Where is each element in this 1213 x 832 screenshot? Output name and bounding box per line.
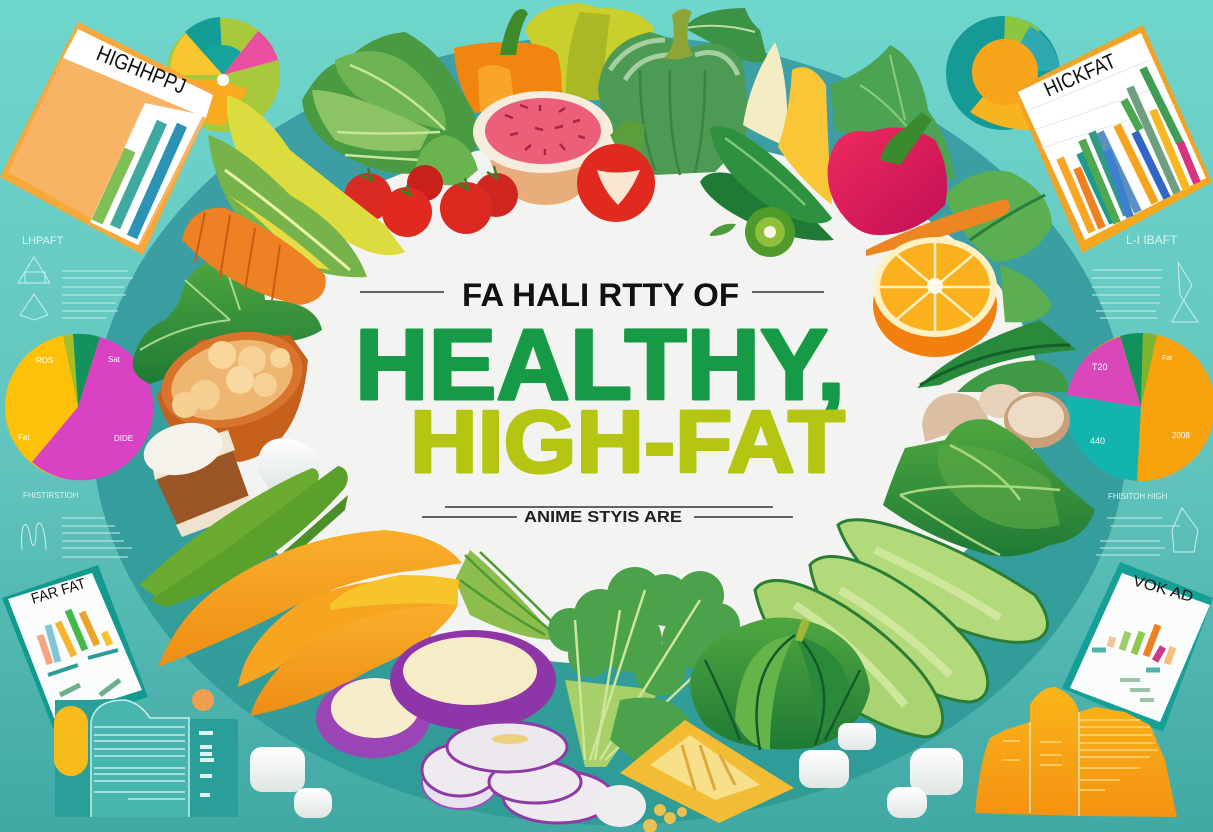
produce: parsley: [548, 567, 740, 767]
produce: green pepper: [598, 9, 747, 175]
pie chart: left: DIDE: [114, 434, 133, 443]
overline rule: [360, 291, 824, 293]
produce: cheese wedge: [620, 720, 794, 823]
produce: yellow-green pepper: [525, 3, 654, 100]
chart sheet: bottom-left Far Fat: [2, 565, 148, 728]
produce: mushrooms: [922, 384, 1070, 448]
pie chart: right: T20: [1092, 362, 1108, 372]
title block: [355, 277, 845, 526]
pie chart: right: 2008: [1172, 431, 1190, 440]
produce: pale yellow squash: [743, 42, 832, 205]
chart title: VOK AD: [1131, 573, 1195, 606]
produce: big leafy green: [883, 419, 1095, 556]
produce: seeds: [643, 804, 687, 832]
pie chart: right: [1066, 333, 1213, 481]
small line diagram: right upper: [1092, 233, 1198, 322]
small line diagram: right upper: L-I IBAFT: [1126, 233, 1178, 247]
produce: red bell pepper: [828, 112, 947, 235]
produce: white cube by jar: [257, 438, 320, 490]
radial wheel: top-right: [946, 16, 1060, 130]
orange skyline block chart: [975, 687, 1177, 817]
chart sheet: bottom-right Vok: [1062, 562, 1213, 732]
pie chart: right: 440: [1090, 436, 1105, 446]
produce: orange slice: [873, 237, 997, 357]
pie chart: left: Fat: [18, 433, 30, 442]
chart sheet: top-right Hick-Fat: [1013, 25, 1212, 253]
produce: small green leaf: [710, 224, 736, 236]
produce: lettuce: [302, 32, 478, 185]
small line diagram: left upper: [18, 235, 133, 320]
eyebrow heading: FA HALI RTTY OF: [462, 277, 739, 313]
produce: carrot: [866, 199, 1010, 256]
main heading line 2: HIGH-FAT: [410, 392, 845, 491]
produce: cucumber slices: [755, 520, 1047, 737]
produce: zucchini: [140, 466, 348, 607]
chart title: HIGHHPPJ: [93, 40, 190, 99]
folder panel with lines: [54, 689, 238, 817]
produce: yellow-green chard: [208, 95, 405, 277]
small line diagram: right lower: FHISITOH HIGH: [1108, 492, 1168, 501]
pie chart: left: ROS: [36, 356, 53, 365]
produce: kiwi: [745, 207, 795, 257]
produce: leaf right of carrot: [945, 171, 1052, 262]
chart title: FAR FAT: [29, 575, 88, 608]
small line diagram: right lower: [1096, 492, 1198, 555]
produce: jar: [138, 415, 254, 537]
produce: greens stalk: [455, 550, 556, 640]
produce: dark leaf behind pepper: [684, 8, 768, 62]
main heading line 1: HEALTHY,: [355, 309, 845, 421]
produce: sliced carrots: [182, 208, 326, 305]
subtitle: ANIME STYIS ARE: [524, 509, 682, 526]
produce: right leaf and beans: [917, 265, 1077, 392]
produce: green cabbage: [690, 618, 870, 750]
produce: purple onion slices: [316, 630, 646, 827]
produce: halved tomato: [577, 120, 655, 222]
produce: spinach bunch: [830, 45, 955, 180]
chart sheet: top-left Highhppj: [0, 22, 217, 255]
radial wheel: top-left: [166, 17, 280, 132]
small line diagram: left upper: LHPAFT: [22, 235, 64, 247]
produce: white fat cubes: [250, 723, 963, 818]
produce: cucumbers: [700, 126, 834, 241]
pie chart: left: [5, 334, 153, 480]
produce: cherry tomatoes: [344, 165, 518, 237]
produce: spinach leaves: [133, 258, 322, 384]
small line diagram: left lower: [22, 491, 132, 557]
produce: nut bowl: [151, 317, 313, 462]
pie chart: left: Sat: [108, 355, 121, 364]
produce: watermelon bowl: [473, 91, 613, 205]
chart title: HICKFAT: [1041, 50, 1120, 102]
sub rule: [422, 507, 793, 517]
small line diagram: left lower: FHISTIRSTIOH: [23, 491, 79, 500]
produce: mangoes: [158, 530, 462, 716]
white centre panel: [200, 135, 1040, 665]
produce: orange pepper: [454, 9, 562, 113]
pie chart: right: Fat: [1162, 355, 1172, 362]
